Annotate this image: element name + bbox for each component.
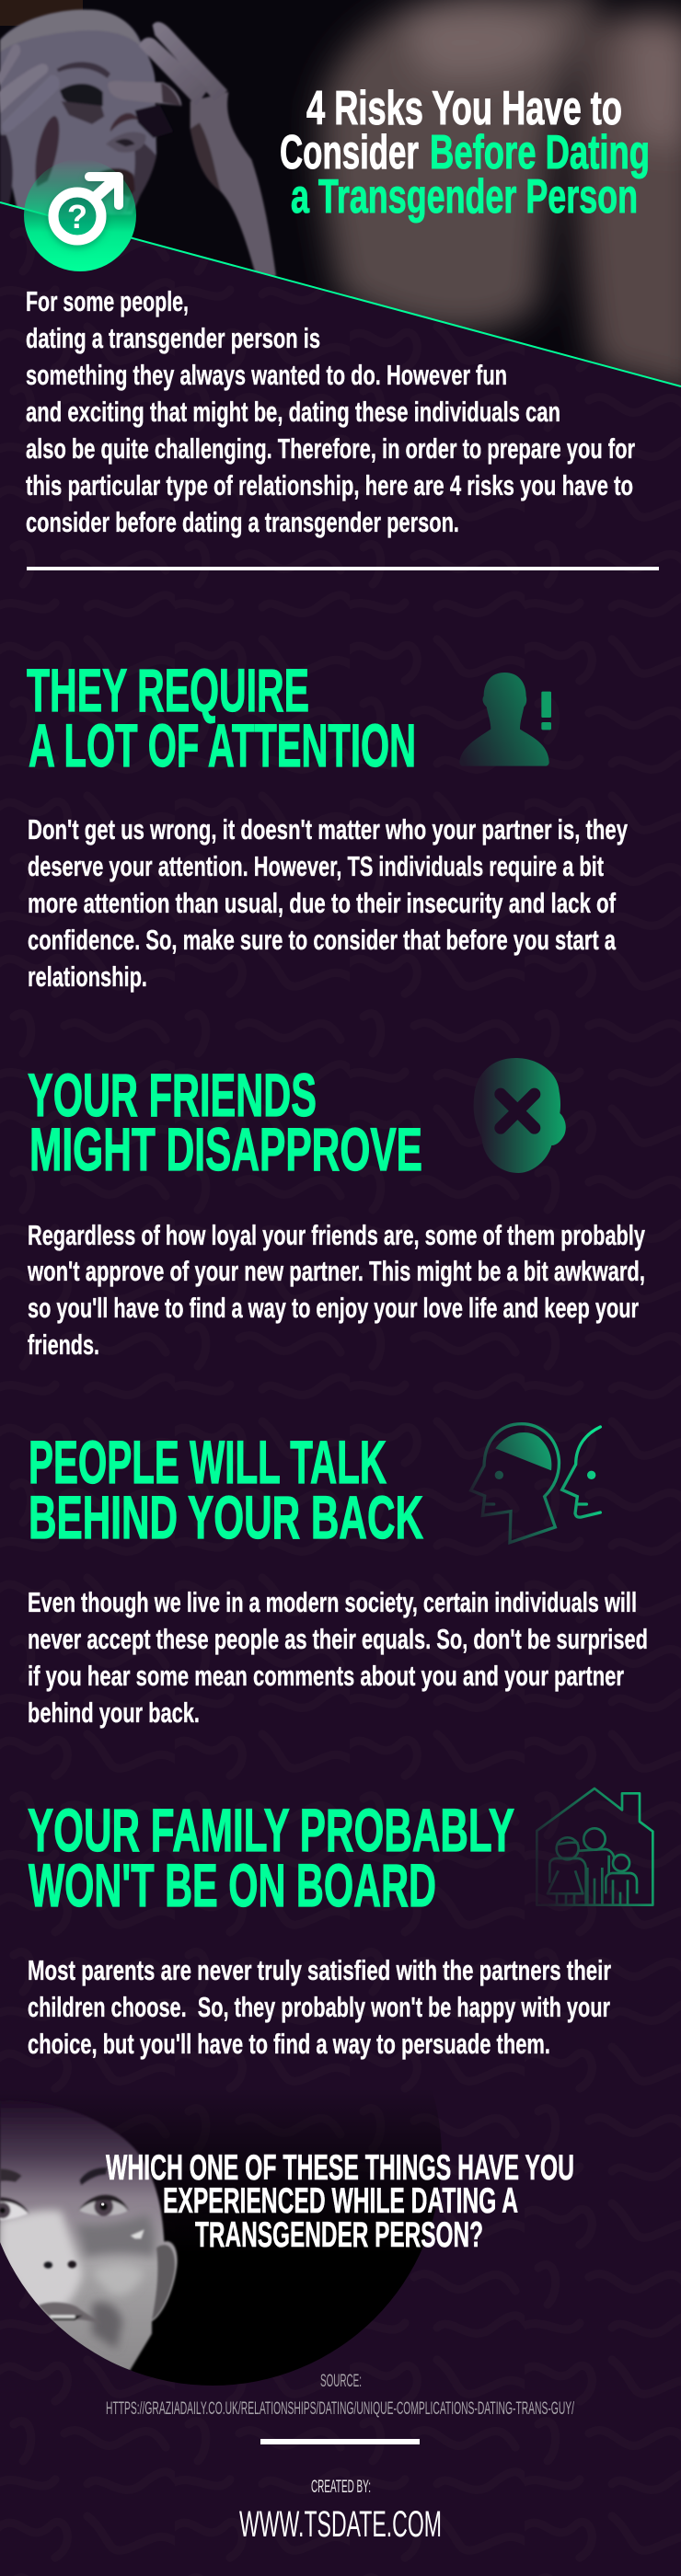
icon: family inside a house xyxy=(537,1788,652,1905)
heading: your friends might disapprove: MIGHT DISAPPROVE xyxy=(29,1115,422,1183)
paragraph: attention: relationship. xyxy=(28,960,147,993)
diagonal green line xyxy=(0,202,681,386)
intro text: For some people, xyxy=(26,285,189,317)
paragraph: family xyxy=(28,1954,611,2060)
source xyxy=(106,2372,574,2419)
heading: they require a lot of attention xyxy=(27,656,416,779)
credits xyxy=(239,2478,442,2545)
photo circle: face with tear xyxy=(0,2109,442,2386)
hero photo: woman covering eye with blurred hands xyxy=(0,0,681,405)
icon: head with X xyxy=(474,1058,566,1173)
source: SOURCE: xyxy=(320,2372,362,2391)
heading: your family probably won't be on board: WON'T BE ON BOARD xyxy=(29,1851,436,1919)
icon: person with exclamation mark xyxy=(459,673,551,766)
paragraph: friends xyxy=(27,1219,646,1361)
intro text xyxy=(26,285,635,538)
question text xyxy=(106,2148,574,2255)
icon: male symbol with question mark badge xyxy=(24,159,136,271)
paragraph: attention xyxy=(28,813,629,993)
title: Consider xyxy=(280,126,419,179)
credits: WWW.TSDATE.COM xyxy=(239,2504,442,2545)
paragraph: talk: behind your back. xyxy=(28,1696,200,1729)
paragraph: friends: friends. xyxy=(28,1328,99,1361)
intro text: dating a transgender person is xyxy=(26,322,320,354)
icon: two faces talking xyxy=(471,1424,600,1543)
heading: people will talk behind your back: BEHIND YOUR BACK xyxy=(29,1483,423,1551)
icon: male symbol with question mark badge: ? xyxy=(67,198,87,236)
question text: TRANSGENDER PERSON? xyxy=(195,2215,483,2255)
heading: your friends might disapprove xyxy=(28,1061,422,1183)
credits: CREATED BY: xyxy=(311,2478,371,2497)
title xyxy=(280,82,650,224)
heading: people will talk behind your back: PEOPLE WILL TALK xyxy=(29,1428,387,1496)
heading: they require a lot of attention: A LOT OF ATTENTION xyxy=(29,711,416,779)
heading: they require a lot of attention: THEY REQUIRE xyxy=(27,656,309,724)
intro text: consider before dating a transgender person. xyxy=(26,506,459,538)
heading: people will talk behind your back xyxy=(29,1428,423,1551)
heading: your family probably won't be on board xyxy=(28,1796,514,1919)
heading: your friends might disapprove: YOUR FRIENDS xyxy=(28,1061,317,1129)
paragraph: talk xyxy=(28,1586,648,1729)
